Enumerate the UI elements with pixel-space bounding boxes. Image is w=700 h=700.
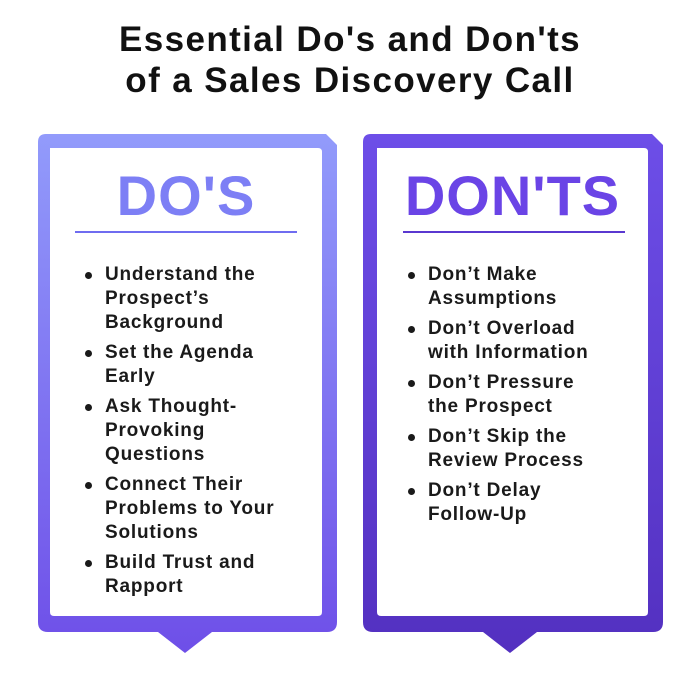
list: do's items: Understand the Prospect’s Background bbox=[105, 264, 256, 333]
panel: do's bbox=[38, 134, 337, 653]
list: don'ts items: Don’t Overload with Information bbox=[428, 318, 589, 363]
list: do's items: Build Trust and Rapport bbox=[105, 552, 255, 597]
list: don'ts items: Don’t Delay Follow-Up bbox=[428, 480, 541, 525]
title bbox=[119, 20, 581, 100]
heading: DO'S: DO'S bbox=[117, 164, 255, 227]
list: do's items: Connect Their Problems to Your Solutions bbox=[105, 474, 274, 543]
title: Essential Do's and Don'ts bbox=[119, 20, 581, 59]
title: of a Sales Discovery Call bbox=[125, 61, 575, 100]
list: do's items: Set the Agenda Early bbox=[105, 342, 254, 387]
list: do's items bbox=[85, 264, 274, 597]
panel: don'ts bbox=[363, 134, 663, 653]
list: do's items: Ask Thought-Provoking Questions bbox=[105, 396, 237, 465]
list: don'ts items: Don’t Pressure the Prospect bbox=[428, 372, 574, 417]
list: don'ts items: Don’t Make Assumptions bbox=[428, 264, 557, 309]
list: don'ts items: Don’t Skip the Review Process bbox=[428, 426, 584, 471]
heading: DON'TS: DON'TS bbox=[405, 164, 620, 227]
list: don'ts items bbox=[408, 264, 589, 525]
